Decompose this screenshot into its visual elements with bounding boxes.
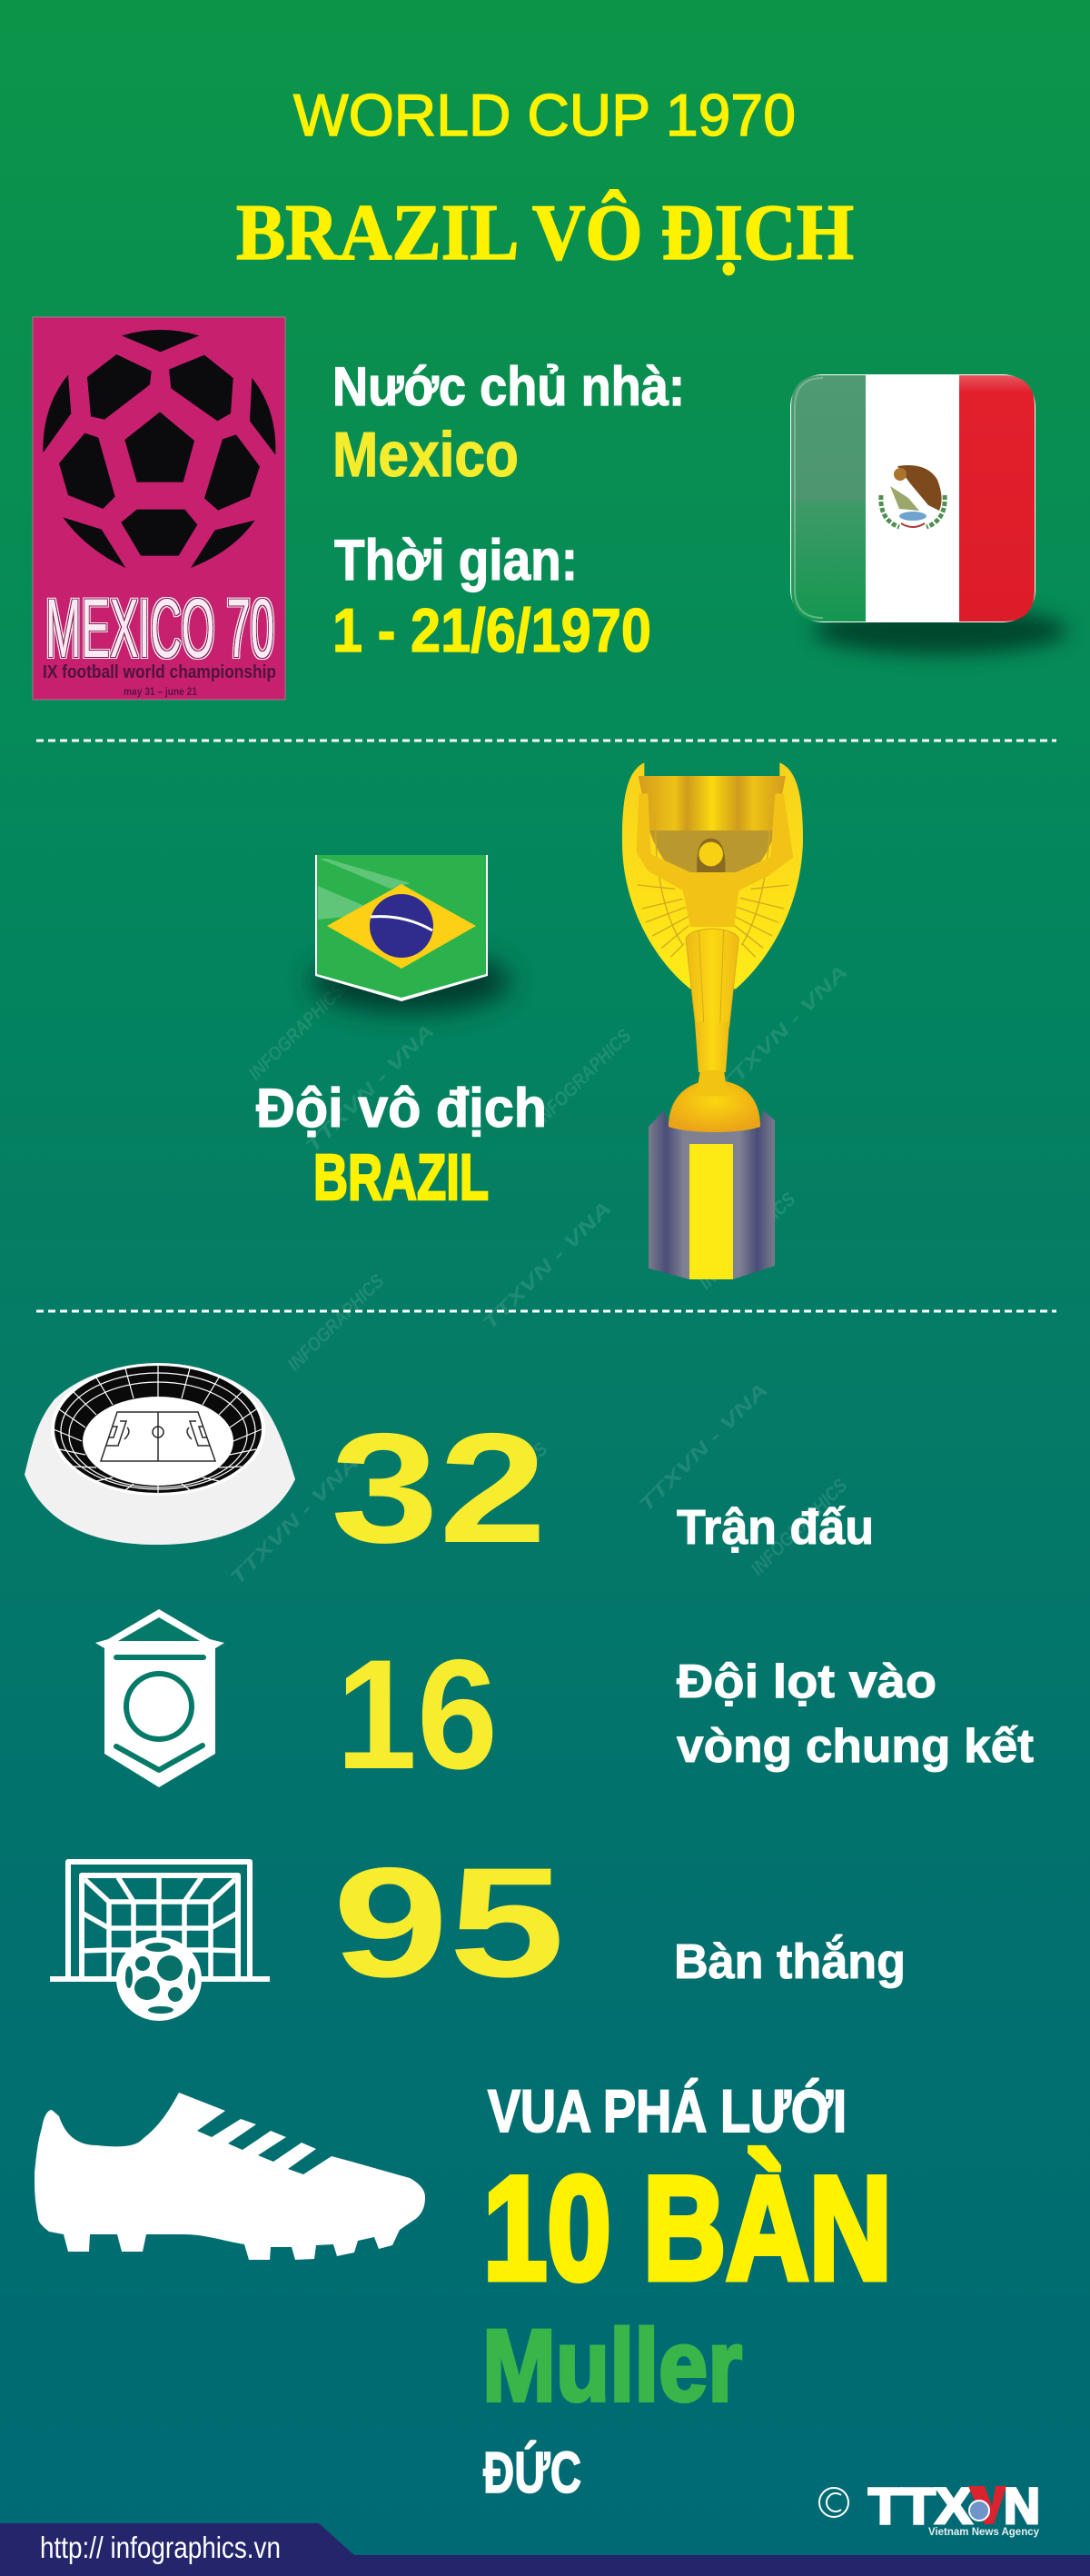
logo letters ttx: TTX	[868, 2477, 972, 2534]
logo letter v	[968, 2486, 1006, 2524]
icon: football boot	[35, 2093, 425, 2260]
name: muller: Muller	[482, 2309, 742, 2422]
number: 95	[332, 1835, 565, 2010]
label: host: Nước chủ nhà:	[332, 356, 685, 417]
label: Trận đấu	[677, 1500, 874, 1555]
logo: ttxvn	[868, 2477, 1040, 2538]
poster: mexico 70	[33, 317, 285, 700]
watermarks: INFOGRAPHICS	[447, 1438, 552, 1544]
label: time: Thời gian:	[334, 529, 578, 592]
copyright symbol	[819, 2488, 848, 2517]
icon: football	[43, 330, 275, 568]
text: host country	[332, 356, 685, 665]
stadium pitch	[101, 1412, 215, 1461]
footer url: http:// infographics.vn	[40, 2531, 281, 2564]
logo globe	[969, 2501, 989, 2521]
watermarks: INFOGRAPHICS	[530, 1025, 636, 1130]
poster wordmark: MEXICO 70	[45, 582, 274, 675]
watermarks: INFOGRAPHICS	[283, 1270, 389, 1376]
watermarks: TTXVN - VNA	[715, 961, 852, 1099]
poster subtitle: IX football world championship	[43, 662, 276, 682]
label line 1: Đội lọt vào	[677, 1656, 936, 1708]
trophy wings and figure	[622, 762, 803, 1027]
number: 10 goals: 10 BÀN	[483, 2146, 892, 2311]
stat: 32 matches	[331, 1401, 874, 1576]
trophy plinth	[649, 1110, 775, 1279]
divider	[36, 740, 1056, 741]
stat: 16 teams	[336, 1627, 1034, 1802]
watermarks: TTXVN - VNA	[635, 1379, 772, 1517]
divider	[36, 1310, 1056, 1312]
watermarks: INFOGRAPHICS	[747, 1475, 852, 1580]
trophy stem	[695, 1022, 729, 1072]
icon: goal and ball	[50, 1862, 270, 2021]
label: top scorer: VUA PHÁ LƯỚI	[488, 2077, 847, 2144]
trophy feet	[696, 1070, 728, 1096]
icon: jules rimet trophy	[622, 762, 803, 1279]
icon: brazil flag ribbon	[286, 854, 522, 1012]
value: mexico: Mexico	[332, 419, 519, 490]
icon: pennant	[95, 1609, 224, 1787]
value: dates: 1 - 21/6/1970	[332, 596, 651, 665]
icon: coat of arms	[881, 465, 945, 527]
footer band	[0, 2523, 1090, 2576]
trophy dome	[669, 1080, 760, 1132]
logo letter n: N	[1004, 2477, 1040, 2534]
watermarks: INFOGRAPHICS	[695, 1189, 800, 1294]
text: champion team	[256, 1078, 547, 1214]
country: germany: ĐỨC	[483, 2440, 581, 2505]
number: 32	[331, 1401, 547, 1576]
number: 16	[336, 1627, 498, 1802]
heading: brazil vo dich: BRAZIL VÔ ĐỊCH	[236, 188, 854, 277]
watermarks: INFOGRAPHICS	[244, 980, 350, 1085]
watermarks: TTXVN - VNA	[226, 1452, 363, 1589]
label line 2: vòng chung kết	[677, 1720, 1034, 1773]
label: Bàn thắng	[674, 1934, 906, 1989]
watermarks: TTXVN - VNA	[479, 1198, 616, 1335]
watermarks	[226, 961, 852, 1589]
stat: 95 goals	[332, 1835, 906, 2010]
value: brazil: BRAZIL	[313, 1142, 489, 1214]
label	[677, 1656, 1034, 1773]
icon: mexico flag	[790, 374, 1067, 654]
top scorer block	[482, 2077, 892, 2505]
label: champion: Đội vô địch	[256, 1078, 547, 1139]
title: world cup 1970: WORLD CUP 1970	[293, 82, 796, 148]
watermarks: TTXVN - VNA	[302, 1020, 439, 1158]
poster dates: may 31 – june 21	[124, 685, 197, 698]
logo tagline: Vietnam News Agency	[928, 2527, 1040, 2538]
trophy plate	[689, 1144, 733, 1279]
icon: stadium	[25, 1363, 295, 1545]
